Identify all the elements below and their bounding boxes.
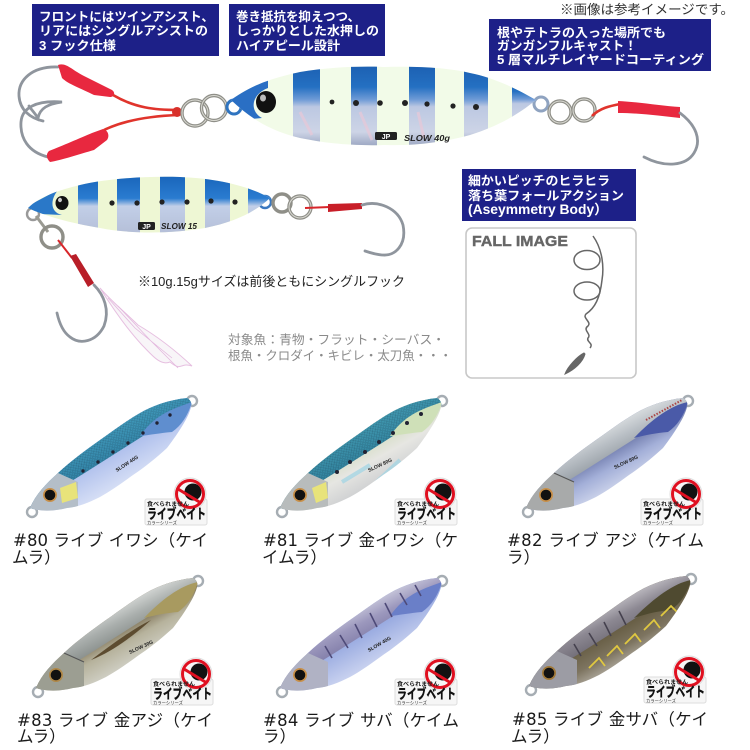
small lure 15g: JP: [142, 224, 151, 231]
lure card: #82: SLOW 80G: [613, 454, 639, 471]
badge: live bait: ライブベイト: [646, 684, 705, 700]
lure card: #83: [17, 565, 213, 746]
lure card: #83: ムラ）: [17, 727, 66, 746]
callout: fall action: [462, 169, 636, 221]
callout: high-peel design: [229, 4, 385, 56]
lure card: #83: #83 ライブ 金アジ（ケイ: [17, 710, 213, 730]
callout: fall action: (Aseymmetry Body）: [468, 202, 608, 217]
small lure 15g: SLOW 15: [161, 222, 198, 231]
lure card: #85: #85 ライブ 金サバ（ケイ: [512, 709, 708, 729]
lure card: #84: ラ）: [263, 727, 296, 746]
lure card: #81: イムラ）: [262, 548, 327, 567]
lure card: #82: #82 ライブ アジ（ケイム: [507, 530, 704, 550]
callout: hook configuration: 3 フック仕様: [39, 38, 117, 53]
badge: live bait: 食べられません: [397, 500, 440, 508]
note: reference image: ※画像は参考イメージです。: [560, 2, 734, 17]
badge: live bait: [145, 478, 207, 526]
text: target fish: 対象魚：青物・フラット・シーバス・: [228, 333, 445, 347]
icon: eye: [256, 91, 276, 113]
badge: live bait: ライブベイト: [397, 686, 456, 702]
callout: high-peel design: ハイアピール設計: [236, 38, 341, 53]
lure card: #80: [12, 385, 208, 567]
badge: live bait: ライブベイト: [153, 686, 212, 702]
badge: live bait: カラーシリーズ: [153, 700, 183, 706]
lure card: #81: [262, 385, 458, 567]
lure card: #80: SLOW 40G: [115, 455, 140, 474]
main lure 40g: JP: [382, 134, 391, 141]
lure card: #85: [511, 563, 708, 746]
badge: live bait: [641, 478, 703, 526]
callout: hook configuration: [32, 4, 219, 56]
badge: live bait: [395, 478, 457, 526]
callout: coating: 5 層マルチレイヤードコーティング: [497, 52, 705, 67]
chart: fall path: [574, 236, 603, 348]
badge: live bait: ライブベイト: [147, 506, 206, 522]
panel: fall image: FALL IMAGE: [472, 233, 568, 250]
callout: coating: 根やテトラの入った場所でも: [497, 25, 666, 40]
icon: small eye: [56, 196, 68, 210]
badge: live bait: ライブベイト: [397, 506, 456, 522]
callout: fall action: 落ち葉フォールアクション: [468, 188, 624, 203]
badge: live bait: 食べられません: [153, 680, 196, 688]
badge: live bait: [644, 656, 706, 704]
callout: high-peel design: 巻き抵抗を抑えつつ、: [236, 9, 360, 24]
lure card: #80: ムラ）: [12, 548, 61, 567]
lure card: #85: ムラ）: [511, 727, 560, 746]
badge: live bait: カラーシリーズ: [397, 700, 427, 706]
callout: hook configuration: フロントにはツインアシスト、: [39, 10, 214, 24]
lure card: #84: #84 ライブ サバ（ケイム: [263, 710, 459, 730]
badge: live bait: 食べられません: [646, 678, 689, 686]
lure card: #82: ラ）: [507, 548, 540, 567]
lure card: #83: SLOW 30G: [128, 639, 154, 656]
badge: live bait: カラーシリーズ: [643, 520, 673, 526]
callout: high-peel design: しっかりとした水押しの: [236, 23, 379, 38]
badge: live bait: 食べられません: [147, 500, 190, 508]
lure card: #84: [263, 565, 459, 746]
badge: live bait: カラーシリーズ: [147, 520, 177, 526]
lure card: #81: SLOW 80G: [367, 457, 393, 474]
lure card: #84: SLOW 40G: [367, 636, 392, 654]
badge: live bait: カラーシリーズ: [397, 520, 427, 526]
badge: live bait: カラーシリーズ: [646, 698, 676, 704]
lure card: #82: [507, 385, 704, 567]
callout: coating: ガンガンフルキャスト！: [497, 38, 637, 53]
text: target fish: 根魚・クロダイ・キビレ・太刀魚・・・: [228, 348, 452, 363]
lure card: #80: #80 ライブ イワシ（ケイ: [13, 530, 208, 550]
lure card: #81: #81 ライブ 金イワシ（ケ: [263, 530, 458, 550]
note: single hook sizes: ※10g.15gサイズは前後ともにシングルフック: [138, 274, 405, 289]
text: target fish: [228, 333, 452, 363]
badge: live bait: 食べられません: [643, 500, 686, 508]
main lure 40g: [19, 60, 698, 164]
callout: hook configuration: リアにはシングルアシストの: [39, 23, 208, 38]
badge: live bait: [151, 658, 213, 706]
badge: live bait: 食べられません: [397, 680, 440, 688]
panel: fall image: [466, 228, 636, 378]
callout: coating: [489, 19, 711, 71]
main lure 40g: SLOW 40g: [404, 134, 450, 143]
callout: fall action: 細かいピッチのヒラヒラ: [468, 173, 610, 188]
small lure 15g: [24, 170, 404, 368]
badge: live bait: ライブベイト: [643, 506, 702, 522]
badge: live bait: [395, 658, 457, 706]
